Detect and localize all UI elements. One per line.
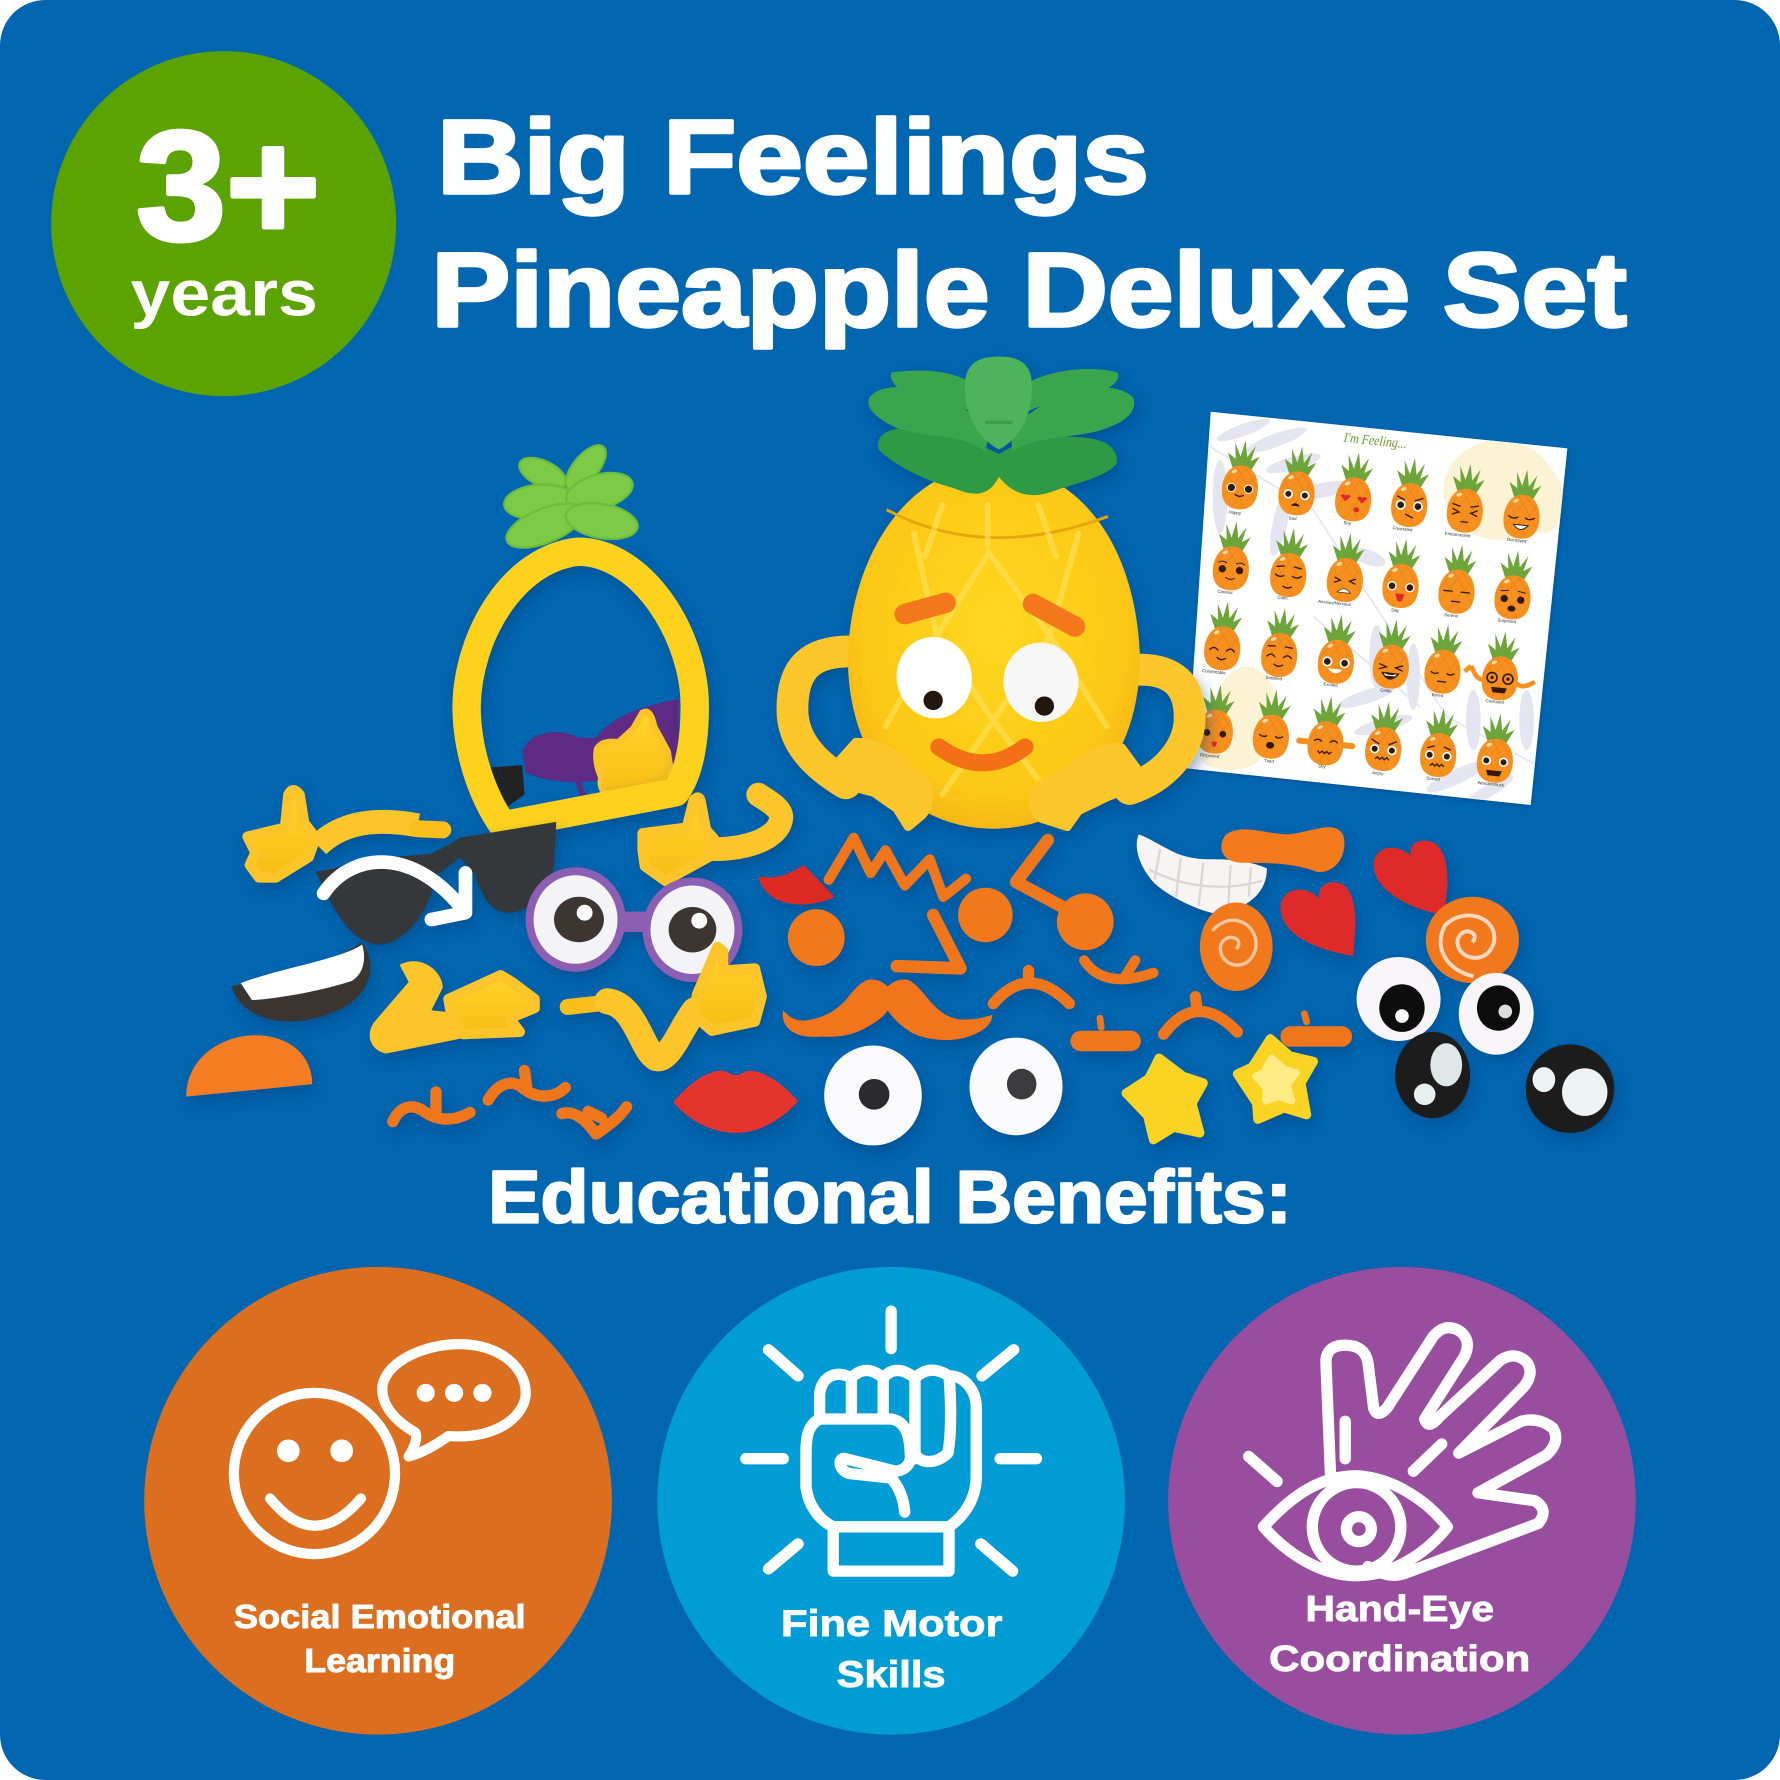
feelings poster (1187, 412, 1567, 809)
red lips (673, 1071, 798, 1133)
white googly eyes (824, 1038, 1063, 1145)
orange spiral pieces (1200, 897, 1519, 991)
mirror frame (467, 552, 695, 825)
section heading: Educational Benefits: (488, 1156, 1292, 1239)
emotion captions: Frustrated (1393, 525, 1413, 532)
arm piece top left (247, 790, 443, 878)
sunglasses (316, 822, 556, 944)
emotion captions: Calm (1277, 595, 1288, 601)
emotion captions: Shy (1318, 763, 1327, 769)
half circle mouth piece (186, 1035, 312, 1097)
row 3 faces (1202, 599, 1540, 704)
benefit: hand-eye coordination (1168, 1267, 1636, 1735)
emotion captions: Scared (1426, 775, 1441, 782)
open mouth piece (232, 942, 370, 1021)
pineapple body (848, 463, 1140, 829)
label: Hand-Eye (1305, 1588, 1494, 1629)
benefit: social emotional learning (144, 1267, 612, 1735)
icon: fist with rays (746, 1311, 1036, 1571)
big pineapple character (792, 356, 1190, 829)
age badge (51, 51, 396, 396)
icon: smiley and speech bubble (234, 1344, 526, 1554)
emotion captions (1200, 509, 1527, 788)
orange eyebrow set (897, 840, 1342, 1041)
emotion captions: Embarrassed (1445, 531, 1471, 538)
emotion captions: Surprised (1497, 617, 1517, 624)
purple glasses with eyes (526, 867, 742, 982)
pineapple arms (792, 651, 857, 783)
mirror leaves (501, 439, 640, 557)
emotion captions: Shy (1343, 520, 1352, 526)
row 4 faces (1195, 683, 1518, 784)
squiggle eyebrows (393, 1070, 627, 1134)
white arrow (324, 862, 465, 920)
red hearts (1281, 841, 1447, 956)
emotion captions: Giddy (1380, 687, 1393, 694)
emotion captions: Anxious/Nervous (1318, 599, 1351, 607)
emotion captions: Bored (1432, 692, 1444, 698)
black and white eyes (1357, 957, 1614, 1133)
teeth mouth piece (1137, 834, 1267, 914)
pineapple hands (838, 742, 1137, 826)
row 1 faces (1220, 438, 1545, 540)
emotion captions: Happy (1228, 509, 1242, 516)
benefit: fine motor skills (657, 1267, 1125, 1735)
emotion captions: Satisfied (1265, 675, 1283, 681)
emotion captions: Tired (1264, 758, 1275, 764)
title: Big Feelings (437, 99, 1149, 216)
moustache (783, 979, 992, 1040)
age number: 3+ (136, 99, 320, 273)
emotion captions: Comfortable (1202, 668, 1226, 676)
benefit: fine motor skills: Skills (837, 1653, 946, 1695)
smile (939, 747, 1025, 763)
pineapple mirror (467, 439, 695, 825)
emotion captions: Sad (1289, 515, 1297, 521)
emotion captions: Silly (1391, 607, 1400, 613)
age unit: years (131, 257, 318, 330)
eyebrows (905, 603, 1075, 627)
title: Pineapple Deluxe Set (431, 232, 1627, 349)
label: Social Emotional (234, 1598, 526, 1635)
red cut mouth and zigzag brow (758, 838, 966, 904)
emotion captions: Angry (1372, 770, 1385, 776)
arm piece middle left (370, 961, 535, 1053)
benefit: hand-eye coordination: Coordination (1269, 1638, 1530, 1679)
toy parts (186, 790, 1614, 1145)
row 2 faces (1211, 519, 1536, 621)
benefit: social emotional learning: Learning (304, 1642, 455, 1679)
emotion captions: Serene (1444, 612, 1459, 619)
arm piece top centre (643, 795, 781, 881)
emotion captions: Overjoyed (1507, 537, 1527, 544)
yellow stars (1126, 1039, 1313, 1140)
emotion captions: Excited (1323, 681, 1338, 688)
emotion captions: Wonderstruck (1477, 780, 1505, 788)
title (431, 99, 1627, 349)
arm piece middle right (568, 947, 762, 1058)
poster heading: I'm Feeling... (1342, 431, 1407, 452)
mirror reflected glasses and hand (490, 699, 679, 808)
emotion captions: Disgusted (1200, 752, 1220, 759)
label: Fine Motor (781, 1602, 1003, 1644)
pineapple crown (868, 356, 1134, 495)
orange bone-shaped mouth (1221, 827, 1344, 872)
pineapple eyes (889, 630, 1084, 727)
orange eye discs (788, 888, 1114, 966)
emotion captions: Confused (1485, 698, 1505, 705)
icon: hand and eye (1249, 1328, 1556, 1576)
emotion captions: Content (1217, 589, 1234, 595)
